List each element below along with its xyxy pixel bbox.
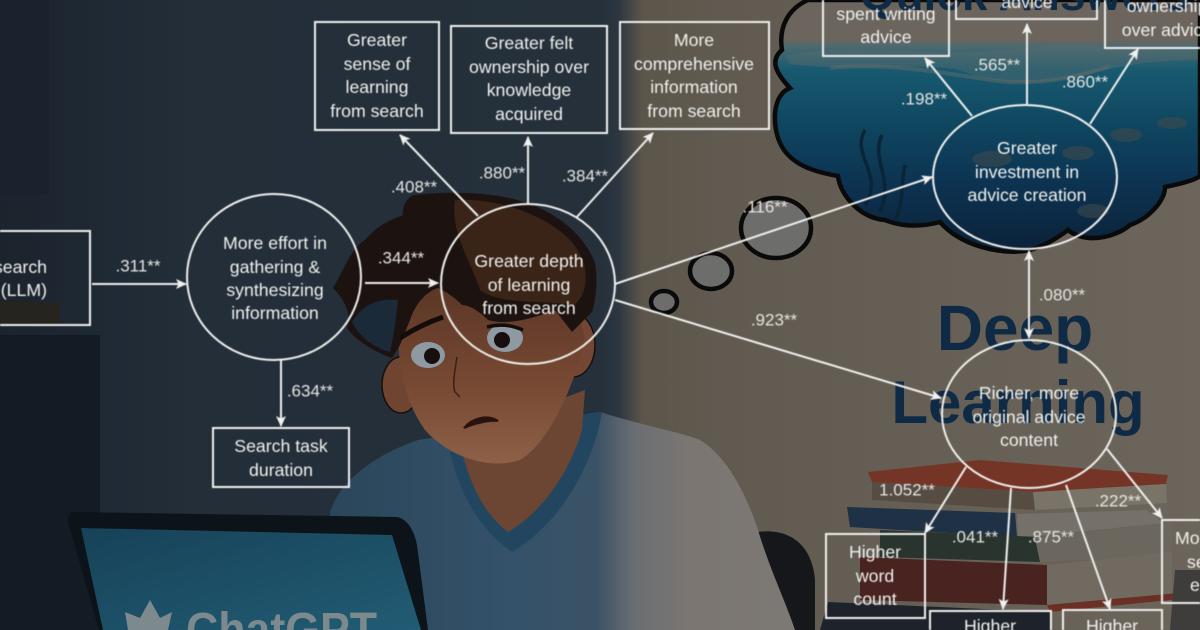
right ear xyxy=(551,313,595,377)
box: higher word count xyxy=(826,534,925,618)
box: felt ownership: ownership over xyxy=(469,57,589,77)
hair xyxy=(333,193,596,358)
nose xyxy=(454,357,460,397)
node: richer content: content xyxy=(1000,430,1058,450)
node: more effort: gathering & xyxy=(230,257,320,277)
node: greater depth: Greater depth xyxy=(474,251,584,271)
box: search task duration: duration xyxy=(249,460,313,480)
arrow to third higher box xyxy=(1066,485,1110,609)
arrow to sense of learning xyxy=(400,135,478,216)
box: higher word count: word xyxy=(855,566,894,586)
left eye xyxy=(400,317,445,368)
box: search task duration xyxy=(213,428,349,487)
arrow: depth to investment xyxy=(615,177,932,284)
path value .311: .311** xyxy=(115,256,161,276)
heading: Deep Learning: Deep xyxy=(937,292,1093,364)
node: more effort xyxy=(187,194,361,360)
laptop with ChatGPT screen xyxy=(68,512,428,630)
arrow to ownership xyxy=(1090,49,1138,124)
path value .860: .860** xyxy=(1062,72,1109,92)
arrow: effort to depth xyxy=(365,282,438,284)
box: sense of learning xyxy=(315,22,439,130)
box: more (cropped at edge): Mo xyxy=(1175,528,1200,548)
arrow to advice box xyxy=(1026,24,1028,104)
box: felt ownership: knowledge xyxy=(487,80,571,100)
box: higher (cropped, right) xyxy=(1063,610,1162,630)
arrow to word count xyxy=(925,467,966,533)
box: time spent writing xyxy=(823,0,949,56)
box: sense of learning: sense of xyxy=(344,54,411,74)
collar xyxy=(450,412,602,552)
node: greater investment: investment in xyxy=(975,162,1079,182)
picture frame and shelf, left xyxy=(0,0,100,630)
box: comprehensive information xyxy=(620,22,769,129)
node: greater investment: advice creation xyxy=(968,185,1086,205)
face xyxy=(398,270,585,463)
node: greater investment: Greater xyxy=(997,138,1057,158)
box: sense of learning: learning xyxy=(346,77,408,97)
neck xyxy=(450,390,585,532)
box: ownership over advice xyxy=(1105,0,1200,48)
node: richer content: Richer, more xyxy=(979,383,1079,403)
mouth xyxy=(464,417,498,428)
chair xyxy=(758,531,815,630)
box: comprehensive information: comprehensive xyxy=(634,54,754,74)
right eye xyxy=(487,324,523,352)
arrow: search to effort xyxy=(92,283,186,285)
box: comprehensive information: information xyxy=(650,77,738,97)
arrow to comprehensive xyxy=(576,133,653,218)
node: greater depth: from search xyxy=(482,298,576,318)
arrow: effort to duration xyxy=(280,360,282,426)
arrow to more box xyxy=(1107,449,1162,518)
box: higher (cropped) xyxy=(930,611,1051,630)
hair highlight xyxy=(454,200,586,305)
path value .408: .408** xyxy=(391,178,438,196)
box: search task duration: Search task xyxy=(234,436,328,456)
thought cloud with ocean xyxy=(775,0,1200,252)
node: more effort: synthesizing xyxy=(226,280,324,300)
path value .222: .222** xyxy=(1095,492,1142,510)
box: more (cropped at edge) xyxy=(1162,520,1200,603)
person: student looking worried xyxy=(330,193,795,630)
path value .384: .384** xyxy=(562,166,609,186)
left ear xyxy=(382,357,420,413)
path value .634: .634** xyxy=(287,382,334,400)
path value .565: .565** xyxy=(974,56,1021,74)
box: felt ownership: Greater felt xyxy=(485,33,573,53)
path value .041: .041** xyxy=(952,528,999,546)
box: higher word count: Higher xyxy=(849,542,901,562)
double arrow: investment and richer content xyxy=(1028,251,1030,338)
box: higher word count: count xyxy=(853,589,897,609)
box: advice effort xyxy=(956,0,1097,19)
arrow to felt ownership xyxy=(527,137,529,205)
dark blue hair tips xyxy=(352,300,398,352)
box: LLM search: (LLM) xyxy=(1,280,47,300)
path value .080: .080** xyxy=(1039,286,1086,304)
box: comprehensive information: More xyxy=(674,30,714,50)
node: more effort: More effort in xyxy=(223,233,327,253)
box: sense of learning: from search xyxy=(330,101,424,121)
box: comprehensive information: from search xyxy=(647,101,741,121)
path value .880: .880** xyxy=(479,164,526,182)
box: felt ownership: acquired xyxy=(495,104,563,124)
box: sense of learning: Greater xyxy=(347,30,407,50)
box: time spent writing: advice xyxy=(860,27,912,47)
box: felt ownership xyxy=(451,26,607,133)
box: LLM search xyxy=(0,231,90,325)
node: greater depth: of learning xyxy=(488,275,570,295)
shirt xyxy=(330,412,795,630)
path value .198: .198** xyxy=(901,90,948,108)
thought bubbles xyxy=(651,198,811,313)
node: greater depth xyxy=(441,204,615,364)
heading: Deep Learning: Learning xyxy=(891,369,1145,436)
path value .923: .923** xyxy=(751,310,798,330)
node: greater investment xyxy=(933,105,1117,249)
arrow to second higher box xyxy=(1003,488,1011,609)
node: richer content: original advice xyxy=(972,407,1086,427)
path value .344: .344** xyxy=(378,248,425,268)
node: richer content xyxy=(942,340,1116,488)
path value .875: .875** xyxy=(1028,528,1075,546)
node: more effort: information xyxy=(231,303,319,323)
box: more (cropped at edge): e xyxy=(1190,575,1200,595)
arrow to spent writing xyxy=(925,58,972,116)
heading: Deep Learning xyxy=(891,292,1145,436)
box: time spent writing: spent writing xyxy=(836,4,936,24)
path value .116: .116** xyxy=(742,198,788,216)
path value 1.052: 1.052** xyxy=(879,480,935,500)
arrow: depth to richer content xyxy=(615,300,941,398)
book stack xyxy=(820,460,1200,630)
